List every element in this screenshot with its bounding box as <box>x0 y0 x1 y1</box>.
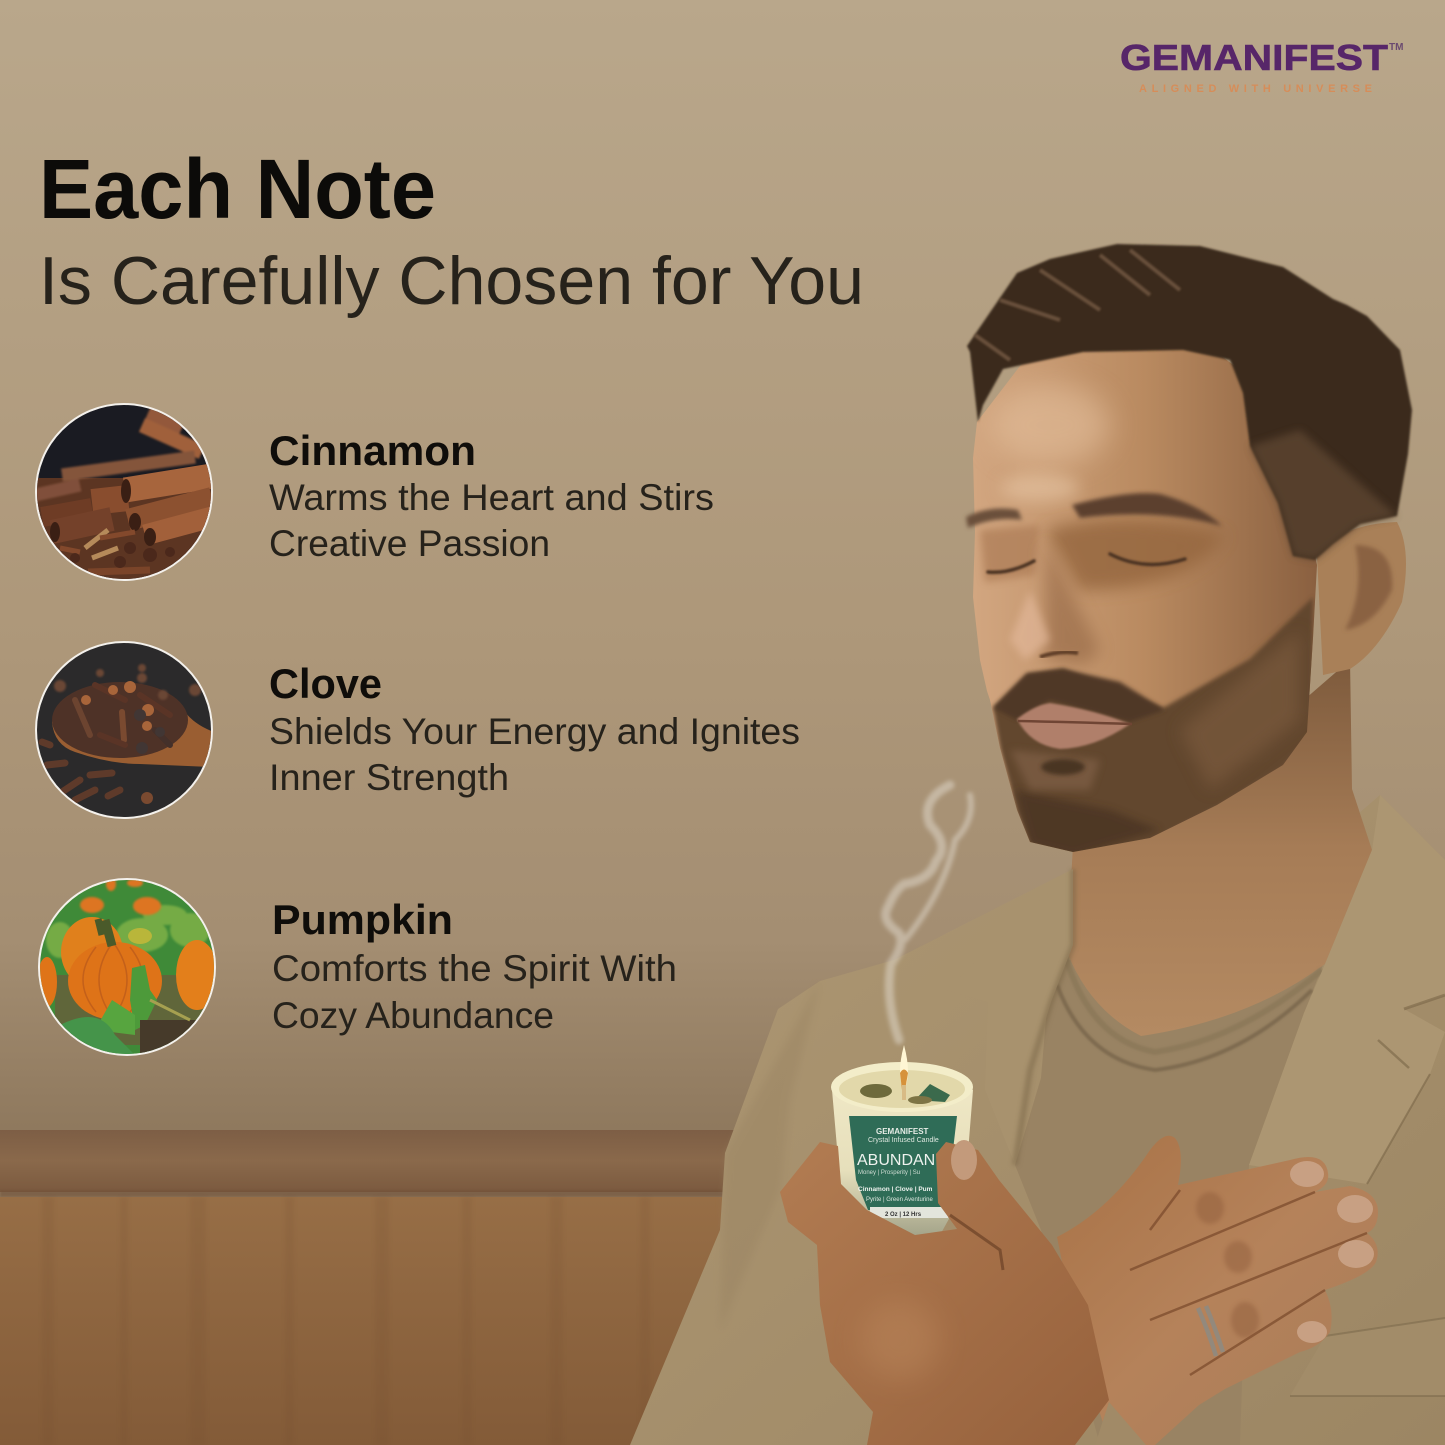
title: Each Note <box>39 142 436 236</box>
fingernails <box>1290 1161 1374 1343</box>
logo: GEMANIFEST <box>1120 37 1388 78</box>
description: cinnamon: Creative Passion <box>269 523 550 564</box>
jacket cuff <box>1095 1402 1146 1445</box>
description: clove: Inner Strength <box>269 757 509 798</box>
beard <box>993 597 1313 856</box>
ear <box>1317 522 1406 675</box>
shirt collar ribs <box>1057 955 1322 1070</box>
hair <box>967 244 1412 560</box>
jacket pocket <box>1290 1318 1445 1396</box>
candle label: ABUNDAN <box>857 1152 935 1169</box>
shirt <box>1015 960 1325 1445</box>
description: pumpkin: Comforts the Spirit With <box>272 948 677 989</box>
note: pumpkin <box>35 875 677 1065</box>
sleeve fold <box>720 981 820 1330</box>
hair highlights <box>975 250 1180 360</box>
description: cinnamon: Warms the Heart and Stirs <box>269 477 714 518</box>
logo: TM <box>1389 42 1403 53</box>
candle label: 2 Oz | 12 Hrs <box>885 1212 922 1218</box>
smoke <box>886 785 971 1040</box>
flame <box>900 1045 908 1090</box>
eyebrows <box>966 509 1022 528</box>
logo: ALIGNED WITH UNIVERSE <box>1139 83 1372 95</box>
knuckles <box>1196 1192 1259 1338</box>
hand shading <box>860 1300 940 1380</box>
candle <box>831 1045 973 1237</box>
icon: pumpkins in a field <box>35 875 220 1065</box>
label: pumpkin: Pumpkin <box>272 896 453 943</box>
left lapel shadow <box>1015 869 1073 1165</box>
crystals <box>860 1084 892 1098</box>
right lapel <box>1249 795 1445 1184</box>
icon: cinnamon sticks <box>35 403 213 581</box>
lapel slit and edge <box>1367 995 1445 1184</box>
mustache <box>993 669 1165 722</box>
thumb shadow <box>950 1215 1003 1270</box>
nose <box>1040 652 1078 657</box>
eye socket shadow right <box>1045 519 1225 590</box>
wood wainscot panel <box>0 1130 760 1445</box>
title <box>39 142 864 319</box>
left hand holding candle <box>780 1140 1109 1445</box>
candle label: Pyrite | Green Aventurine <box>866 1197 933 1203</box>
nose highlight <box>1010 590 1050 660</box>
description: pumpkin: Cozy Abundance <box>272 995 554 1036</box>
icon: cloves on spoon <box>30 640 220 820</box>
note: cinnamon <box>30 400 714 588</box>
candle label: Money | Prosperity | Su <box>858 1170 920 1176</box>
man with candle illustration <box>630 244 1445 1445</box>
wedding ring <box>1198 1306 1223 1356</box>
finger creases <box>1130 1190 1367 1375</box>
hair fade at temple <box>1250 430 1397 560</box>
left lapel <box>946 869 1073 1165</box>
candle label <box>849 1116 957 1218</box>
face <box>966 340 1317 856</box>
nose shadow <box>1045 540 1100 665</box>
thumbnail <box>951 1140 977 1180</box>
note: clove <box>30 640 800 820</box>
lips <box>1017 703 1130 749</box>
title: Is Carefully Chosen for You <box>39 243 864 319</box>
skin under lip <box>1010 750 1100 790</box>
description: clove: Shields Your Energy and Ignites <box>269 711 800 752</box>
soul patch <box>1041 759 1085 775</box>
logo <box>1120 37 1403 95</box>
forehead highlight <box>990 385 1110 465</box>
closed eyes <box>988 554 1185 572</box>
brow highlight <box>1000 474 1080 502</box>
jacket <box>630 795 1445 1445</box>
eye socket shadow left <box>980 525 1040 582</box>
candle label: Cinnamon | Clove | Pum <box>858 1186 933 1193</box>
neck <box>1067 660 1372 1036</box>
candle label: Crystal Infused Candle <box>868 1137 939 1144</box>
right hand on chest <box>1057 1136 1378 1445</box>
label: cinnamon: Cinnamon <box>269 427 476 474</box>
candle label: GEMANIFEST <box>876 1127 929 1136</box>
label: clove: Clove <box>269 660 382 707</box>
